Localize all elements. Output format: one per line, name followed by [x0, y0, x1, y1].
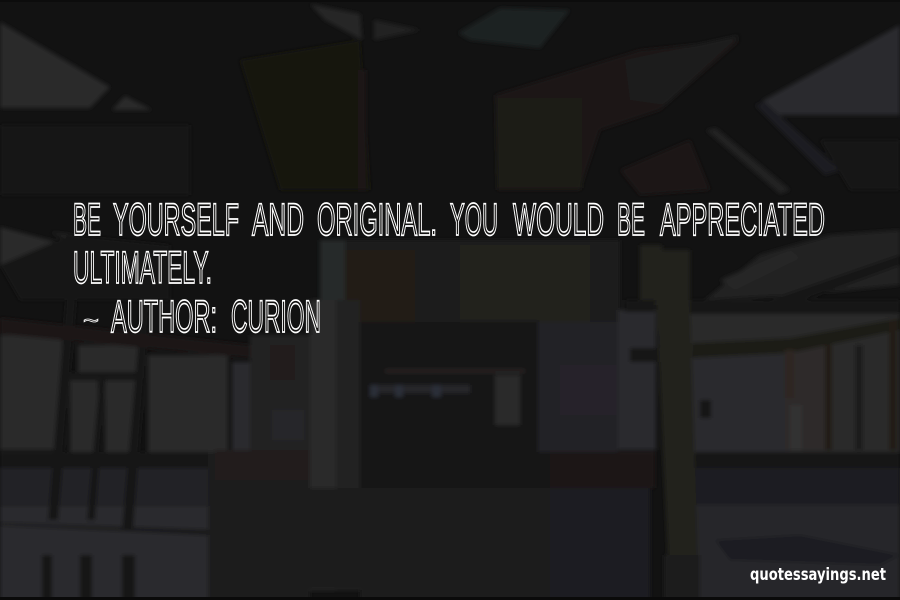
upper rusted cylinder	[495, 40, 740, 190]
central control panel	[360, 322, 538, 450]
author line: AUTHOR:	[111, 291, 217, 342]
cylinder right side	[538, 322, 618, 452]
left lower wall and floor	[0, 452, 215, 468]
left window frame columns	[48, 300, 76, 520]
quote line 1: WOULD	[513, 194, 604, 245]
quote line 1	[73, 194, 825, 245]
quote line 2: ULTIMATELY.	[73, 242, 212, 293]
right wall	[690, 305, 900, 455]
cylinder upper band	[320, 240, 620, 330]
author line: CURION	[231, 291, 321, 342]
quote line 1: ORIGINAL.	[317, 194, 437, 245]
sky: upper right	[762, 25, 900, 115]
right upper windows	[705, 230, 900, 300]
quote line 1: YOU	[450, 194, 498, 245]
quote line 1: BE	[73, 194, 101, 245]
keypad lights	[370, 385, 441, 397]
left rusty truss	[0, 125, 190, 195]
author line: ~	[83, 308, 99, 333]
right lower wall and floor	[695, 452, 900, 468]
main olive column	[657, 250, 690, 310]
ceiling grate	[310, 4, 362, 40]
light column	[310, 300, 336, 590]
central base and graffiti panel	[208, 452, 310, 600]
quote line 1: YOURSELF	[113, 194, 239, 245]
left windows	[0, 335, 62, 450]
right beams and rust	[690, 300, 900, 314]
diagonal beams, upper right	[706, 128, 790, 194]
quote line 1: AND	[252, 194, 304, 245]
sky: upper left	[0, 22, 110, 108]
top and bottom edges	[0, 0, 900, 2]
quote line 1: BE	[617, 194, 645, 245]
